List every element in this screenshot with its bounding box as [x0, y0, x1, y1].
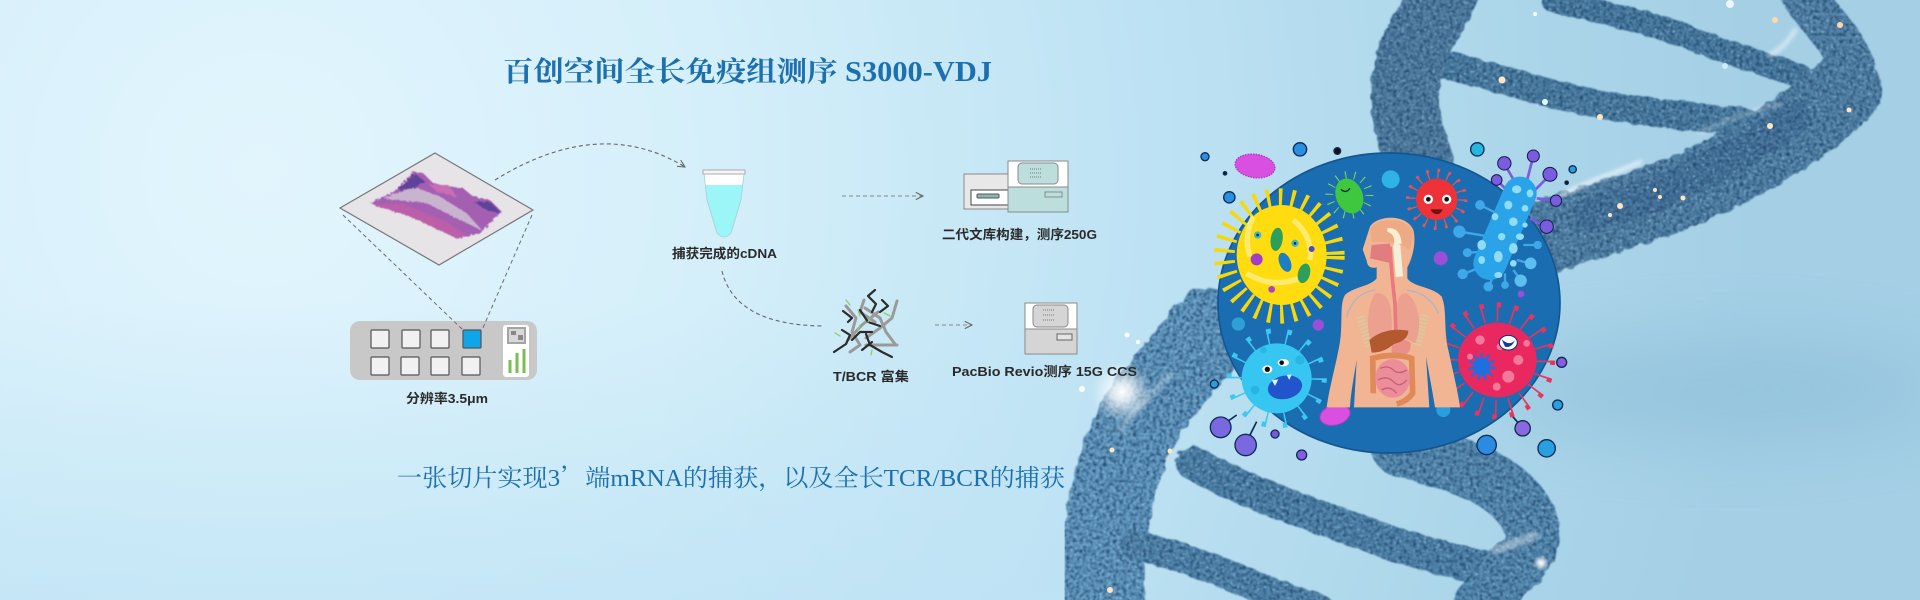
spine	[1397, 245, 1399, 277]
tissue section	[371, 172, 502, 238]
esophagus	[1390, 247, 1396, 337]
blue disc	[1218, 153, 1560, 453]
ribs	[1360, 315, 1425, 347]
small intestine	[1375, 359, 1410, 398]
pink germs	[1234, 152, 1352, 429]
body silhouette	[1327, 218, 1460, 407]
QR code	[507, 327, 526, 344]
crimson virus	[1441, 305, 1553, 417]
selected capture area	[463, 330, 481, 348]
subtitle: 一张切片实现3 ’端mRNA的捕获，以及全长TCR/BCR的捕获	[397, 458, 1065, 493]
title: 百创空间全长免疫组测序 S3000-VDJ	[503, 55, 992, 88]
arrow: tube to enrichment	[722, 271, 823, 326]
zoom guide lines	[343, 215, 532, 330]
T/BCR label: T/BCR 富集	[833, 369, 909, 384]
tube label: 捕获完成的cDNA	[672, 246, 778, 261]
oral cavity	[1370, 243, 1392, 263]
liver	[1369, 330, 1408, 353]
chip label: 分辨率3.5μm	[406, 391, 488, 406]
immune illustration	[1201, 143, 1576, 460]
DNA double helix	[1079, 0, 1854, 600]
arrow: tube to library	[842, 195, 923, 197]
stomach	[1391, 340, 1411, 356]
blue bacterium	[1454, 150, 1562, 290]
arrow: slide to tube	[495, 144, 685, 180]
cyan virus	[1229, 331, 1324, 426]
green bars	[508, 349, 526, 373]
red germ	[1408, 170, 1466, 228]
yellow germ	[1224, 199, 1334, 313]
airways	[1347, 290, 1438, 317]
glowing sparkles	[1079, 0, 1852, 593]
T/BCR molecules icon	[834, 290, 897, 357]
PacBio sequencer	[1025, 303, 1077, 354]
human anatomy	[1327, 218, 1460, 407]
PacBio label: PacBio Revio测序 15G CCS	[952, 364, 1137, 379]
tissue slide	[340, 153, 533, 265]
arrow: enrichment to PacBio	[935, 324, 972, 326]
loose particles	[1201, 143, 1576, 460]
large intestine	[1373, 355, 1413, 404]
chip	[350, 321, 537, 380]
green germ	[1329, 174, 1369, 218]
lungs	[1368, 293, 1419, 343]
short-read label: 二代文库构建，测序250G	[942, 227, 1097, 242]
DNA highlights	[1120, 30, 1795, 550]
short-read sequencer	[964, 161, 1068, 212]
tube	[703, 170, 745, 237]
